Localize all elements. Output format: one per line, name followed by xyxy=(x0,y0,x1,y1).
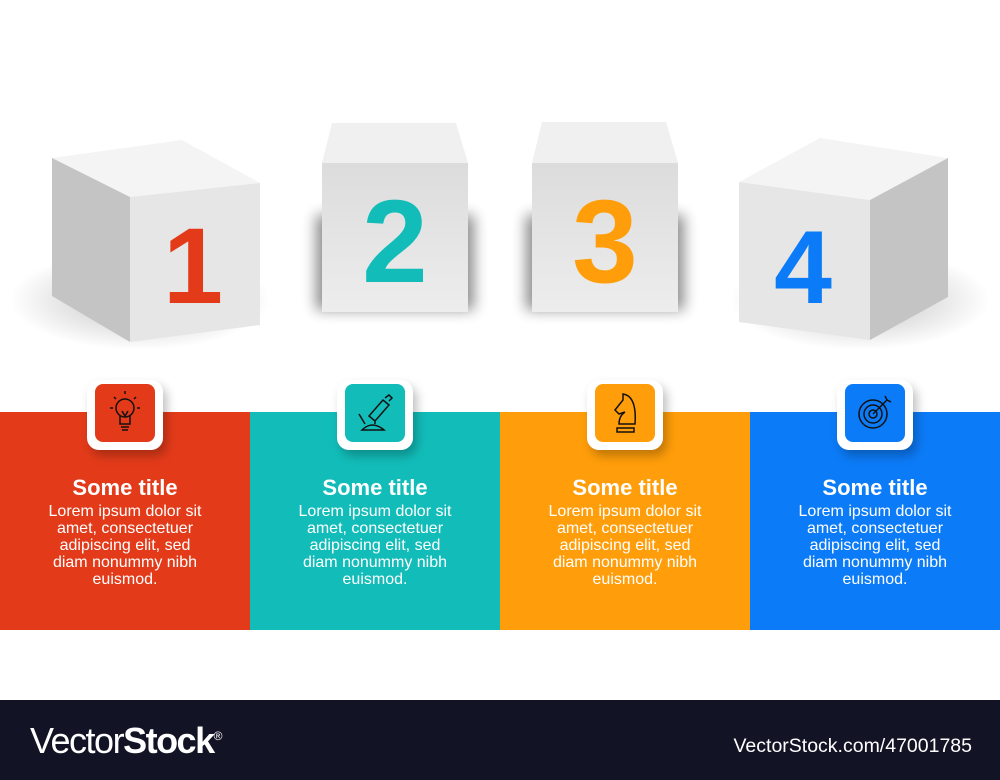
panel: step 1: Some title xyxy=(72,475,178,500)
panel: step 3: adipiscing elit, sed xyxy=(560,537,690,554)
icon: light bulb xyxy=(87,380,163,450)
panel: step 3: Some title xyxy=(572,475,678,500)
cube 4 xyxy=(730,138,990,350)
footer url: VectorStock.com/47001785 xyxy=(734,735,972,757)
icon: target xyxy=(837,380,913,450)
panel: step 4: euismod. xyxy=(843,571,907,588)
cube 3 xyxy=(526,122,684,312)
panel: step 1: amet, consectetuer xyxy=(57,520,193,537)
footer logo: VectorStock® xyxy=(30,720,221,761)
panel: step 2: Lorem ipsum dolor sit xyxy=(299,503,451,520)
panel: step 4: amet, consectetuer xyxy=(807,520,943,537)
panel: step 2: amet, consectetuer xyxy=(307,520,443,537)
panel: step 2 xyxy=(250,412,500,630)
panel: step 2: adipiscing elit, sed xyxy=(310,537,440,554)
panel: step 1 xyxy=(0,412,250,630)
cube 1: 1 xyxy=(163,205,223,326)
icon: chess knight xyxy=(587,380,663,450)
panel: step 1: diam nonummy nibh xyxy=(53,554,197,571)
panel: step 4: Some title xyxy=(822,475,928,500)
cube 3: 3 xyxy=(572,176,638,308)
panel: step 3: euismod. xyxy=(593,571,657,588)
panel: step 2: Some title xyxy=(322,475,428,500)
panel: step 4: diam nonummy nibh xyxy=(803,554,947,571)
panel: step 3 xyxy=(500,412,750,630)
panel: step 3: Lorem ipsum dolor sit xyxy=(549,503,701,520)
panel: step 3: diam nonummy nibh xyxy=(553,554,697,571)
cube 4: 4 xyxy=(774,210,832,326)
panel: step 2: diam nonummy nibh xyxy=(303,554,447,571)
panel: step 2: euismod. xyxy=(343,571,407,588)
panel: step 3: amet, consectetuer xyxy=(557,520,693,537)
panel: step 4 xyxy=(750,412,1000,630)
cubes xyxy=(28,122,972,344)
footer xyxy=(0,700,1000,780)
panel: step 1: adipiscing elit, sed xyxy=(60,537,190,554)
panel: step 1: Lorem ipsum dolor sit xyxy=(49,503,201,520)
panel: step 1: euismod. xyxy=(93,571,157,588)
icon: microscope xyxy=(337,380,413,450)
panel: step 4: adipiscing elit, sed xyxy=(810,537,940,554)
cube 2 xyxy=(316,123,474,312)
panel: step 4: Lorem ipsum dolor sit xyxy=(799,503,951,520)
cube 2: 2 xyxy=(362,176,428,308)
cube 1 xyxy=(10,140,270,350)
